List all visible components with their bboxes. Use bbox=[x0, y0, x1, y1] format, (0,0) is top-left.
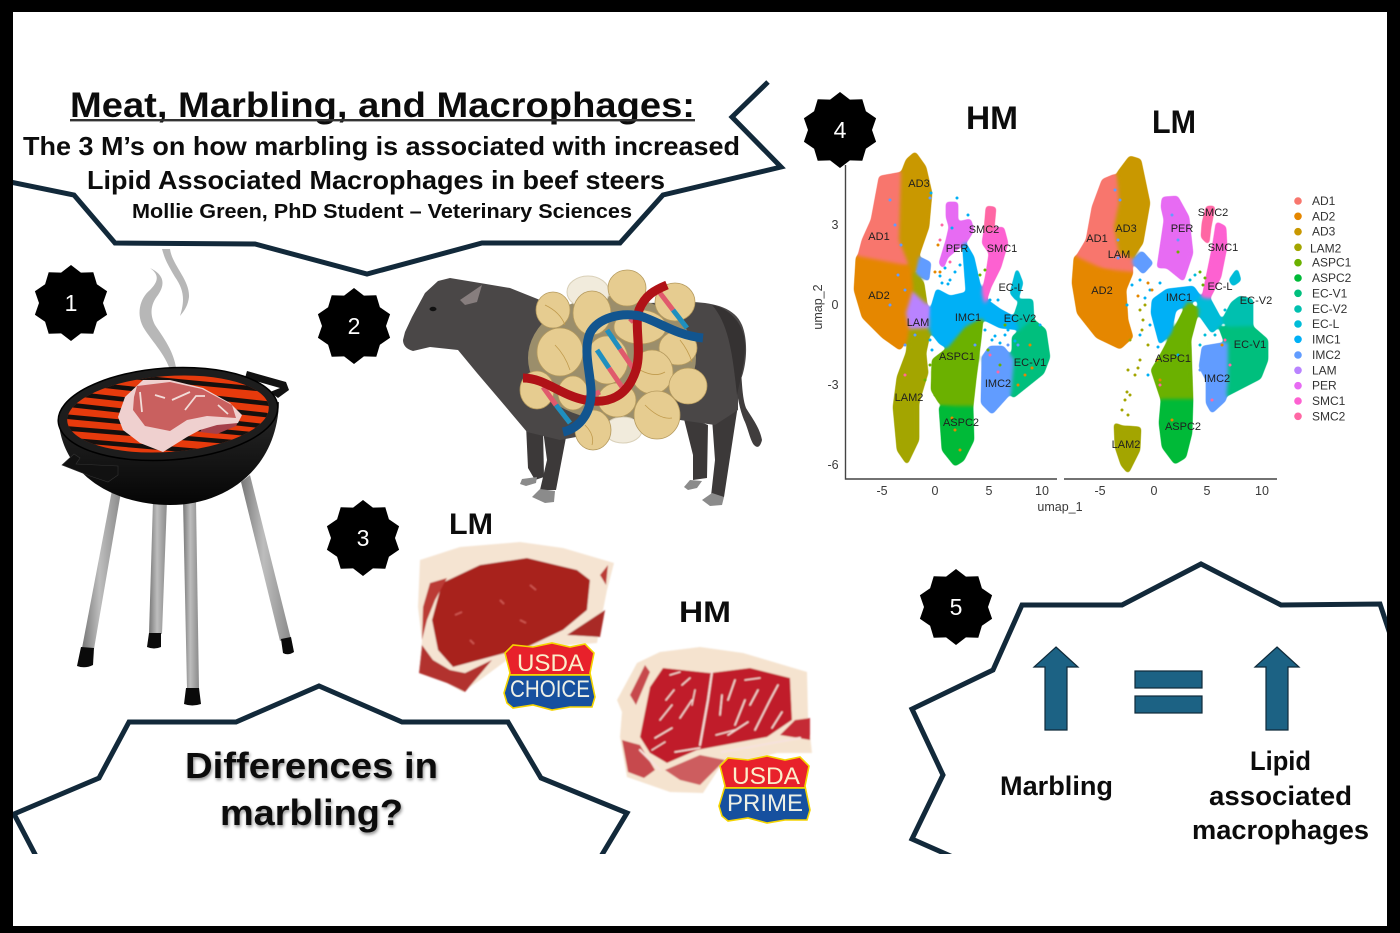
LM cluster labels: AD1 bbox=[1086, 233, 1108, 245]
legend: IMC2 bbox=[1312, 348, 1341, 362]
badge: USDA Choice: CHOICE bbox=[510, 676, 590, 703]
text: lipid associated macrophages bbox=[1192, 746, 1369, 845]
HM axes bbox=[846, 165, 1057, 479]
HM y ticks: 0 bbox=[832, 298, 839, 312]
HM x ticks: 5 bbox=[986, 484, 993, 498]
LM cluster labels: LAM bbox=[1108, 249, 1130, 261]
title block bbox=[23, 86, 740, 223]
legend: AD1 bbox=[1312, 194, 1336, 208]
DNA blue strand bbox=[563, 315, 703, 432]
steer legs bbox=[526, 390, 738, 497]
LM cluster labels: LAM2 bbox=[1112, 439, 1140, 451]
step badge 5 bbox=[920, 569, 992, 645]
badge: USDA Prime: PRIME bbox=[727, 790, 803, 817]
text: lipid associated macrophages: Lipid bbox=[1250, 746, 1311, 776]
step badge 1 bbox=[35, 265, 107, 341]
left handle bbox=[62, 454, 118, 482]
legend: IMC1 bbox=[1312, 332, 1341, 346]
label: LM steak: LM bbox=[449, 508, 493, 541]
step badge 2: 2 bbox=[348, 313, 360, 339]
steer hooves bbox=[520, 477, 724, 506]
legend: LAM2 bbox=[1310, 241, 1342, 255]
HM cluster labels: IMC2 bbox=[985, 378, 1011, 390]
main title: Meat, Marbling, and Macrophages: bbox=[70, 86, 695, 125]
differences heading: marbling? bbox=[220, 792, 403, 833]
badge: USDA Choice bbox=[500, 640, 600, 710]
axis label: umap_1: umap_1 bbox=[1037, 500, 1083, 514]
icon: steer with fat cells and DNA bbox=[403, 270, 762, 506]
grill rim bbox=[55, 360, 281, 468]
step badge 4 bbox=[804, 92, 876, 168]
differences bubble outline bbox=[14, 686, 627, 858]
HM y ticks bbox=[827, 218, 839, 472]
LM cluster labels: AD3 bbox=[1115, 223, 1137, 235]
callout: differences in marbling bbox=[14, 686, 627, 858]
subtitle line one: The 3 M’s on how marbling is associated with increased bbox=[23, 131, 740, 161]
HM cluster labels: EC-V1 bbox=[1014, 357, 1046, 369]
legend: PER bbox=[1312, 379, 1337, 393]
HM x ticks: 10 bbox=[1035, 484, 1049, 498]
chart: UMAP HM bbox=[827, 153, 1057, 498]
LM cluster labels: SMC1 bbox=[1208, 242, 1238, 254]
HM cluster labels: PER bbox=[946, 243, 968, 255]
LM cluster labels: ASPC2 bbox=[1165, 421, 1201, 433]
fat mass bbox=[520, 270, 707, 450]
legend: AD3 bbox=[1312, 225, 1336, 239]
text: lipid associated macrophages: macrophages bbox=[1192, 815, 1369, 845]
legend: ASPC1 bbox=[1312, 256, 1352, 270]
differences heading bbox=[185, 745, 438, 833]
grill bowl bbox=[59, 402, 279, 505]
heading: LM plot: LM bbox=[1152, 104, 1196, 140]
LM x ticks: 5 bbox=[1204, 484, 1211, 498]
subtitle line two: Lipid Associated Macrophages in beef steers bbox=[87, 165, 665, 195]
HM clusters bbox=[855, 153, 1049, 465]
LM axis bbox=[1064, 478, 1277, 480]
HM cluster labels: SMC1 bbox=[987, 243, 1017, 255]
HM y ticks: 3 bbox=[832, 218, 839, 232]
LM cluster labels: SMC2 bbox=[1198, 207, 1228, 219]
LM cluster labels: EC-V2 bbox=[1240, 295, 1272, 307]
differences heading: Differences in bbox=[185, 745, 438, 786]
chart: UMAP LM bbox=[1064, 157, 1277, 498]
icon: barbecue grill bbox=[55, 360, 294, 706]
text: marbling: Marbling bbox=[1000, 771, 1113, 801]
steer body bbox=[403, 278, 746, 440]
badge: USDA Prime: USDA bbox=[732, 763, 800, 790]
step badge 3: 3 bbox=[357, 525, 369, 551]
legend: EC-L bbox=[1312, 317, 1340, 331]
legend: AD2 bbox=[1312, 209, 1336, 223]
author line: Mollie Green, PhD Student – Veterinary Sciences bbox=[132, 200, 632, 223]
callout: conclusion bubble outline bbox=[912, 564, 1392, 858]
HM cluster labels: IMC1 bbox=[955, 312, 981, 324]
LM x ticks bbox=[1094, 484, 1269, 498]
HM y ticks: -3 bbox=[827, 378, 839, 392]
legend: EC-V2 bbox=[1312, 302, 1348, 316]
LM clusters bbox=[1073, 157, 1267, 472]
hot grate bbox=[65, 369, 271, 459]
badge: USDA Prime bbox=[715, 753, 815, 823]
step badge 2 bbox=[318, 288, 390, 364]
arrow: marbling up bbox=[1034, 647, 1078, 730]
image: high-marbling steak bbox=[617, 647, 812, 793]
LM cluster labels: ASPC1 bbox=[1155, 353, 1191, 365]
steer tail bbox=[735, 345, 762, 447]
HM cluster labels: EC-L bbox=[998, 282, 1024, 294]
HM y ticks: -6 bbox=[827, 458, 839, 472]
image: low-marbling steak bbox=[418, 542, 614, 692]
LM cluster labels: IMC2 bbox=[1204, 373, 1230, 385]
steer ear bbox=[460, 285, 482, 305]
HM cluster labels: AD3 bbox=[908, 178, 930, 190]
DNA red strand bbox=[523, 285, 667, 401]
HM cluster labels: LAM bbox=[907, 317, 929, 329]
icon: smoke wisps bbox=[140, 249, 189, 379]
steak on grill bbox=[118, 380, 242, 452]
LM cluster labels: IMC1 bbox=[1166, 292, 1192, 304]
step badge 4: 4 bbox=[834, 117, 847, 143]
LM cluster labels: AD2 bbox=[1091, 285, 1113, 297]
HM x ticks bbox=[876, 484, 1049, 498]
DNA rungs bbox=[543, 293, 687, 423]
legend: SMC1 bbox=[1312, 394, 1346, 408]
badge: USDA Choice: USDA bbox=[517, 650, 584, 677]
legend: SMC2 bbox=[1312, 409, 1346, 423]
HM cluster labels: EC-V2 bbox=[1004, 313, 1036, 325]
step badge 3 bbox=[327, 500, 399, 576]
step badge 1: 1 bbox=[65, 290, 77, 316]
LM x ticks: 0 bbox=[1151, 484, 1158, 498]
heading: HM plot: HM bbox=[966, 100, 1018, 136]
LM x ticks: 10 bbox=[1255, 484, 1269, 498]
arrow: lipid associated macrophages up bbox=[1255, 647, 1299, 730]
legend: EC-V1 bbox=[1312, 286, 1348, 300]
grill legs bbox=[77, 475, 294, 706]
title underline bbox=[70, 119, 695, 121]
HM cluster labels: LAM2 bbox=[895, 392, 923, 404]
HM cluster labels: ASPC1 bbox=[939, 351, 975, 363]
legend: ASPC2 bbox=[1312, 271, 1352, 285]
grate bars bbox=[67, 377, 268, 452]
equals sign bbox=[1135, 671, 1202, 713]
axis label: umap_2: umap_2 bbox=[811, 284, 825, 330]
HM x ticks: -5 bbox=[876, 484, 888, 498]
LM x ticks: -5 bbox=[1094, 484, 1106, 498]
LM cluster labels: EC-L bbox=[1207, 281, 1233, 293]
LM cluster labels: EC-V1 bbox=[1234, 339, 1266, 351]
step badge 5: 5 bbox=[950, 594, 962, 620]
HM cluster labels: SMC2 bbox=[969, 224, 999, 236]
steer eye bbox=[430, 307, 436, 311]
callout: title speech bubble outline bbox=[10, 82, 781, 274]
HM cluster labels: AD1 bbox=[868, 231, 890, 243]
right handle bbox=[245, 371, 289, 398]
HM cluster labels: ASPC2 bbox=[943, 417, 979, 429]
LM cluster labels bbox=[1086, 207, 1272, 451]
HM cluster labels bbox=[868, 178, 1046, 429]
legend bbox=[1294, 194, 1352, 423]
label: HM steak: HM bbox=[679, 596, 731, 629]
legend: LAM bbox=[1312, 363, 1337, 377]
HM x ticks: 0 bbox=[932, 484, 939, 498]
LM cluster labels: PER bbox=[1171, 223, 1193, 235]
HM cluster labels: AD2 bbox=[868, 290, 890, 302]
steer rump shading bbox=[712, 305, 745, 395]
text: lipid associated macrophages: associated bbox=[1209, 781, 1352, 811]
